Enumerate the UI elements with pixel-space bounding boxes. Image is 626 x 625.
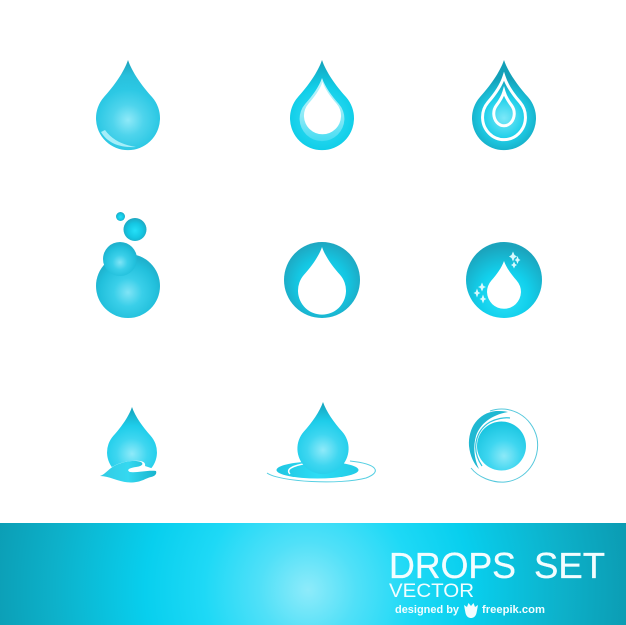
sparkles <box>474 252 520 304</box>
icon: drop with concentric rings <box>472 60 536 150</box>
icon: drop on ripple <box>267 402 375 482</box>
inner white arc <box>289 463 312 474</box>
credit text: designed by <box>395 604 460 616</box>
ripple pool <box>276 462 358 478</box>
icon: freepik crown <box>464 603 478 618</box>
icon: ball with swirl <box>469 409 538 482</box>
icon: white drop in circle <box>284 242 360 318</box>
icon: bubbles <box>96 212 160 318</box>
banner title: DROPS <box>389 545 516 586</box>
icon: drop with white core <box>290 60 354 150</box>
hand <box>102 461 157 481</box>
icon: drop over hand <box>100 407 157 483</box>
icon: glossy water drop <box>96 60 160 150</box>
icon: sparkling drop in circle <box>466 242 542 318</box>
banner <box>0 523 626 625</box>
swirl crescent <box>469 411 508 469</box>
outer ripple line <box>267 461 375 482</box>
banner subtitle: VECTOR <box>389 580 474 602</box>
credit site: freepik.com <box>482 604 545 616</box>
banner title: SET <box>534 545 605 586</box>
